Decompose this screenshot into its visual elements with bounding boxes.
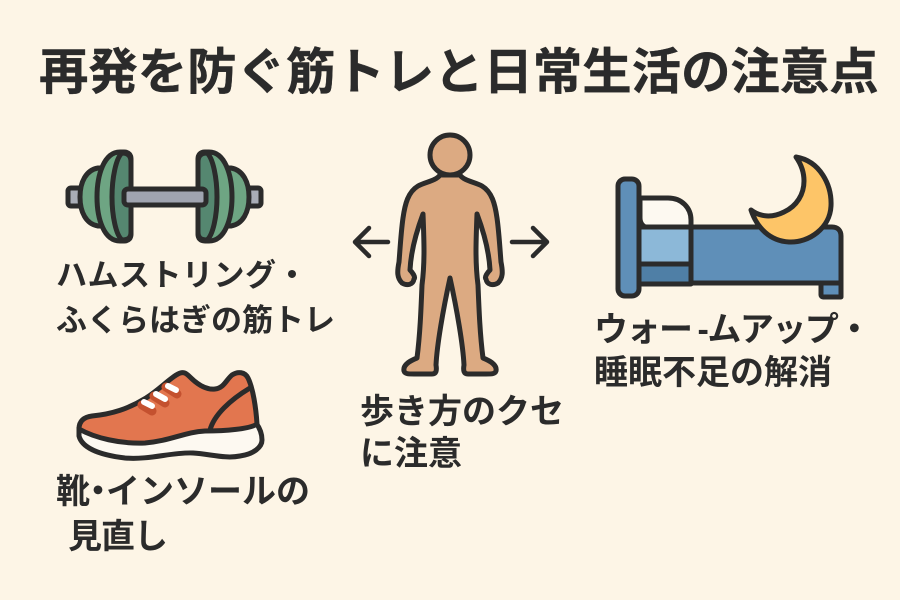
arrow: left xyxy=(355,228,388,256)
label: shoes and insoles: 靴・インソールの xyxy=(56,473,310,511)
icon: bed and moon xyxy=(618,157,841,297)
icon: running shoe xyxy=(79,373,262,458)
label: warm-up and sleep: 睡眠不足の解消 xyxy=(594,354,832,392)
icon: dumbbell xyxy=(68,152,261,241)
arrow: right xyxy=(512,228,547,256)
label: hamstring and calf training: ふくらはぎの筋トレ xyxy=(56,303,335,338)
label: warm-up and sleep: ウォー-ムアップ・ xyxy=(594,311,870,349)
label: walking habits: に注意 xyxy=(360,435,462,473)
label: hamstring and calf training: ハムストリング・ xyxy=(56,258,308,293)
label: shoes and insoles xyxy=(56,473,310,556)
icon: standing person xyxy=(398,135,502,374)
label: warm-up and sleep xyxy=(594,311,870,392)
label: shoes and insoles: 見直し xyxy=(68,518,167,556)
label: walking habits xyxy=(360,393,564,473)
label: hamstring and calf training xyxy=(56,258,335,338)
label: walking habits: 歩き方のクセ xyxy=(360,393,564,431)
title: 再発を防ぐ筋トレと日常生活の注意点 xyxy=(39,45,879,100)
